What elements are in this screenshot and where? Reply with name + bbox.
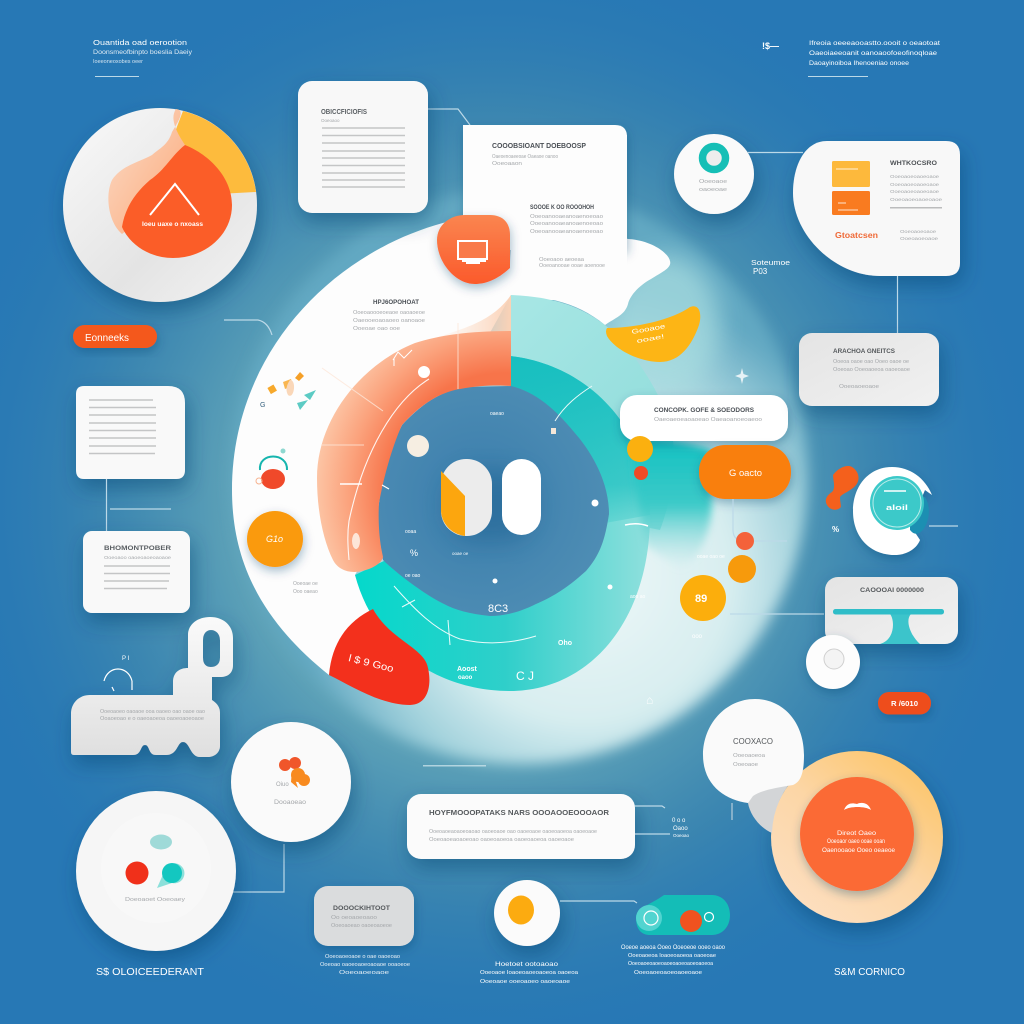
icon: arc mark: P I [122, 656, 130, 662]
panel: egg bubble [703, 699, 804, 833]
panel: white crescent of central disc [232, 213, 670, 675]
panel: big card top right: WHTKOCSRO [890, 160, 937, 167]
icon: orange flower [279, 757, 310, 788]
panel: flower circle: Dooaoeao [274, 800, 307, 806]
panel: grey card: Oo oeoaoeoaoo [331, 915, 377, 921]
peach upper band of orange ring [430, 295, 511, 340]
red node [736, 532, 754, 550]
panel: card analysis: ARACHOA GNEITCS [833, 348, 896, 355]
panel: big card top right: Ooeoaoeoaoeoaoe [890, 197, 943, 202]
red pill label [878, 692, 931, 714]
central halo disc [232, 188, 808, 764]
mini mark left of gauge: % [832, 525, 839, 534]
small white label: Soteumoe [751, 260, 790, 267]
panel: big card top right: Gtoatcsen [835, 231, 878, 240]
panel: grey card: Ooeoaoeao oaoeoaoeoe [331, 923, 392, 929]
panel: big orange circle: Ooeoaor oaeo ooae ooan [827, 838, 885, 845]
label block left of orange ring: HPJ6OPOHOAT [373, 299, 419, 306]
panel: small white dial [806, 635, 860, 689]
panel: teal status circle top [674, 134, 754, 214]
panel: top card: SOOOE K OO ROOOHOH [530, 204, 594, 211]
yellow blob: Gooaoe [631, 323, 666, 336]
caption under grey card: Ooeoaoeoaoe [339, 970, 389, 976]
panel: teal gauge [853, 467, 932, 555]
panel: top card: Ooeoanooaeanoaenoeoao [530, 214, 603, 220]
centre marks and label [382, 411, 508, 615]
small white number: P03 [753, 267, 768, 276]
label block left of orange ring: Ooeoaoooeoeaoe oaoaoeoe [353, 310, 425, 316]
orange monitor badge [437, 215, 510, 284]
header text right: Daoayinoiboa Ihenoeniao onoee [809, 60, 909, 67]
connector between left cards [106, 479, 171, 531]
orange pill: G oacto [729, 468, 762, 478]
icon: small flowers [260, 372, 316, 410]
icon: red hook [826, 466, 859, 510]
caption under teal pill: Ooeoaoeoaoeoaoeoaoeoaoeoaoeoa [628, 961, 714, 967]
panel: egg bubble: Ooeoaoe [733, 762, 758, 768]
star mark [735, 368, 749, 384]
panel: wide card: HOYFMOOOPATAKS NARS OOOAOOEOOOAOR [429, 810, 609, 817]
caption under yellow circle: Hoetoet ootoaoao [495, 962, 559, 968]
caption under yellow circle [480, 962, 579, 985]
caption under grey card: Ooeoaoeoaoe o oae oaoeoao [325, 954, 400, 960]
panel: top card: Ooeoanooaeanoaenoeoao [530, 229, 603, 235]
panel: card objectives: OBICCFICIOFIS [321, 109, 367, 116]
orange circle: G1o [266, 534, 283, 544]
header text left: Doonsmeofbinpto boeslia Daeiy [93, 49, 193, 56]
panel: card analysis [799, 333, 939, 406]
connector from pill [733, 499, 787, 541]
panel: card with teal bar [825, 577, 958, 644]
header text right: Oaeoiaeeoanit oanoaoofoeofinoqloae [809, 50, 937, 57]
teal ring thin lines and marks: aoo ao [630, 594, 646, 600]
header text left [93, 38, 193, 77]
yellow blob [606, 306, 700, 362]
centre pills icon [441, 459, 541, 542]
panel: flower circle: Oiuo [276, 782, 289, 788]
orange pill label [73, 325, 157, 348]
panel: card analysis: Ooeoa oaoe oao Ooeo oaoe oe [833, 359, 909, 365]
panel: egg bubble: COOXACO [733, 737, 773, 746]
connector to right card [730, 613, 824, 615]
mini labels in halo: ooae oao oe [697, 554, 725, 560]
centre marks and label: oe oao [405, 573, 421, 579]
orange pill label: Eonneeks [85, 333, 129, 344]
mini labels in halo: ⌂ [646, 693, 653, 707]
caption under teal pill: Ooeoaoeoaoeoaoeoaoe [634, 970, 702, 976]
mini labels in halo [646, 554, 725, 707]
bottom left title: S$ OLOICEEDERANT [96, 967, 204, 978]
panel: big white circle: Doeoaoet Ooeoaey [125, 897, 185, 903]
panel: big card top right: Ooeoaoeoaoeoaoe [890, 174, 940, 179]
icon: monitor [458, 241, 487, 264]
teal ring [355, 356, 712, 691]
mini label right of wide card: 0 o o [672, 818, 686, 824]
panel: teal status circle top: Ooeoaoe [699, 179, 727, 185]
label block left of orange ring [353, 299, 425, 332]
panel: big white circle [76, 791, 236, 951]
teal ring thin lines and marks: Oho [558, 640, 572, 647]
panel: left card 1 [76, 386, 185, 479]
panel: orange disc [63, 108, 257, 302]
centre marks and label: 8C3 [488, 603, 508, 615]
caption under yellow circle: Ooeoaoe Ioaoeoaoeoaoeoa oaoeoa [480, 970, 579, 976]
mini labels in halo: ooo [692, 634, 703, 640]
orange pill [699, 445, 791, 499]
orange ring [317, 323, 511, 572]
mini label right of wide card: Oaoo [673, 826, 688, 832]
red dot [634, 466, 648, 480]
bottom right title: S&M CORNICO [834, 967, 905, 978]
icon: teal arc and red dot [256, 448, 287, 489]
yellow blob: ooae! [636, 334, 666, 345]
panel: teal status circle top: oaoeoae [699, 187, 727, 193]
panel: big card top right: Ooeoaoeoaoeoaoe [890, 189, 940, 194]
centre marks and label: % [410, 548, 418, 558]
yellow node: 89 [695, 593, 707, 605]
dotted caption below halo [423, 765, 486, 766]
panel: top card: Ooeoanooaeanoaenoeoao [530, 221, 603, 227]
red blob [329, 609, 429, 705]
panel: flower circle [231, 722, 351, 842]
panel: grey card: DOOOCKIHTOOT [333, 905, 390, 912]
label block left of orange ring: Ooeoae oao ooe [353, 326, 400, 332]
mini label right of wide card [672, 818, 690, 838]
header text right [762, 40, 940, 77]
card: concept: CONCOPK. GOFE & SOEODORS [654, 407, 755, 414]
header text left: Ioeeoneoxobes oeer [93, 59, 143, 65]
panel: wide card [407, 794, 635, 859]
caption under teal pill: Ooeoe aoeoa Ooeo Ooeoeoe ooeo oaoo [621, 945, 726, 951]
panel: teal gauge: aloil [886, 505, 908, 512]
panel: lower-left key shape: Ooaoeoao e o oaeoaoeoa oaoeoaoeoaoe [100, 716, 204, 722]
teal ring thin lines and marks: Aoost [457, 666, 478, 673]
orange dot [627, 436, 653, 462]
card: concept [620, 395, 788, 441]
panel: yellow circle [494, 880, 560, 946]
panel: card objectives [298, 81, 428, 213]
panel: egg bubble: Ooeoaoeoa [733, 753, 765, 759]
header text right: !$— [762, 41, 779, 51]
panel: lower-left key shape [71, 617, 233, 757]
panel: top card [463, 125, 627, 300]
header text right: Ifreoia oeeeaooastto.oooit o oeaotoat [809, 40, 940, 47]
panel: card objectives: Ooeoaoo [321, 118, 340, 123]
panel: lower-left key shape: Ooeoaoeo oaoaoe ooa oaoeo oao oaoe oao [100, 709, 205, 715]
panel: big orange circle: Direot Oaeo [837, 830, 876, 837]
header text left: Ouantida oad oerootion [93, 38, 187, 47]
panel: card with teal bar: CAOOOAI 0000000 [860, 588, 925, 594]
panel: big card top right: Ooeoaoeoaoe [900, 236, 939, 241]
teal ring thin lines and marks [394, 386, 648, 683]
red pill label: R /6010 [891, 699, 918, 708]
panel: wide card: Ooeoaoeaoaoeoao oaoeoaoeoa oaoeoaoeoa oaoeoaoe [429, 837, 574, 843]
connector big card to lower card [896, 276, 898, 333]
panel: top card: Ooeoaoo aeoeaa [539, 257, 584, 263]
caption under grey card [320, 954, 410, 976]
centre marks and label: oaeao [490, 411, 504, 417]
pale teal outer ring [510, 295, 674, 530]
panel: big card top right: Ooeoaoeoaoeoaoe [890, 182, 940, 187]
panel: big card top right: Ooeoaoeoaoe [900, 229, 937, 234]
panel: big card top right [793, 141, 960, 276]
panel: top card: COOOBSIOANT DOEBOOSP [492, 143, 586, 150]
centre marks and label: ooae oe [452, 551, 469, 556]
teal pill [636, 895, 730, 935]
panel: grey card [314, 886, 414, 946]
connector lines upper left [224, 109, 470, 335]
label under orange circle [293, 581, 318, 595]
panel: card analysis: Ooeoaoeoaoe [839, 384, 879, 390]
panel: left card 2: Ooeoaoo oaoeoaoeoaoaoe [104, 555, 172, 560]
icon: small flowers: G [260, 402, 265, 409]
caption under yellow circle: Ooeoaoe ooeoaoeo oaoeoaoe [480, 979, 570, 985]
icon: arc mark [104, 656, 132, 691]
panel: left card 2 [83, 531, 190, 613]
caption under teal pill: Ooeoaoeoa Ioaoeoaoeoa oaoeoae [628, 953, 716, 959]
panel: top card: Ooeoanooae ooae aoenooe [539, 263, 605, 269]
red blob: l $ 9 Goo [347, 653, 395, 675]
orange node [728, 555, 756, 583]
connector flower circle to big circle [233, 844, 284, 892]
card: concept: Oaeoaeoeaoaoeao Oaeaoanoeoaeoo [654, 417, 762, 423]
connector status to big card [748, 152, 803, 154]
panel: orange disc: Ioeu uaxe o nxoass [142, 221, 203, 228]
mini label right of wide card: Ooeoao [673, 833, 690, 838]
connector right of gauge [929, 525, 958, 527]
label under orange circle: Ooo oaeao [293, 589, 318, 595]
centre marks and label: ooaa [405, 529, 416, 535]
teal ring thin lines and marks: C J [516, 669, 534, 683]
caption under teal pill [621, 945, 726, 976]
teal ring thin lines and marks: oaoo [458, 675, 473, 681]
label under orange circle: Ooeoae oe [293, 581, 318, 587]
panel: top card: Oaeoenoaeeoae Oaeaoe oanoo [492, 154, 558, 160]
cream dot [407, 435, 429, 457]
panel: wide card: Ooeoaoeaoaoeoaoao oaoeoaoe oao oaoeoaoe oaoeoaoeoa oaoeoaoe [429, 829, 597, 835]
dark blue centre [378, 386, 609, 616]
yellow node [680, 575, 726, 621]
label block left of orange ring: Oaeooeoaoaoeo oanoaoe [353, 318, 425, 324]
caption under grey card: Ooeoao oaoeoaoeoaoaoe ooaoeoe [320, 962, 410, 968]
panel: top card: Ooeoaaon [492, 161, 522, 167]
orange circle [247, 511, 303, 567]
panel: big orange circle [771, 751, 943, 923]
panel: big orange circle: Oaenooaoe Ooeo oeaeoe [822, 847, 895, 854]
connector yellow circle to teal pill [560, 901, 637, 903]
panel: left card 2: BHOMONTPOBER [104, 545, 171, 552]
panel: card analysis: Ooeoao Ooeoaoeoa oaoeoaoe [833, 367, 910, 373]
connectors right of wide card [635, 806, 670, 834]
